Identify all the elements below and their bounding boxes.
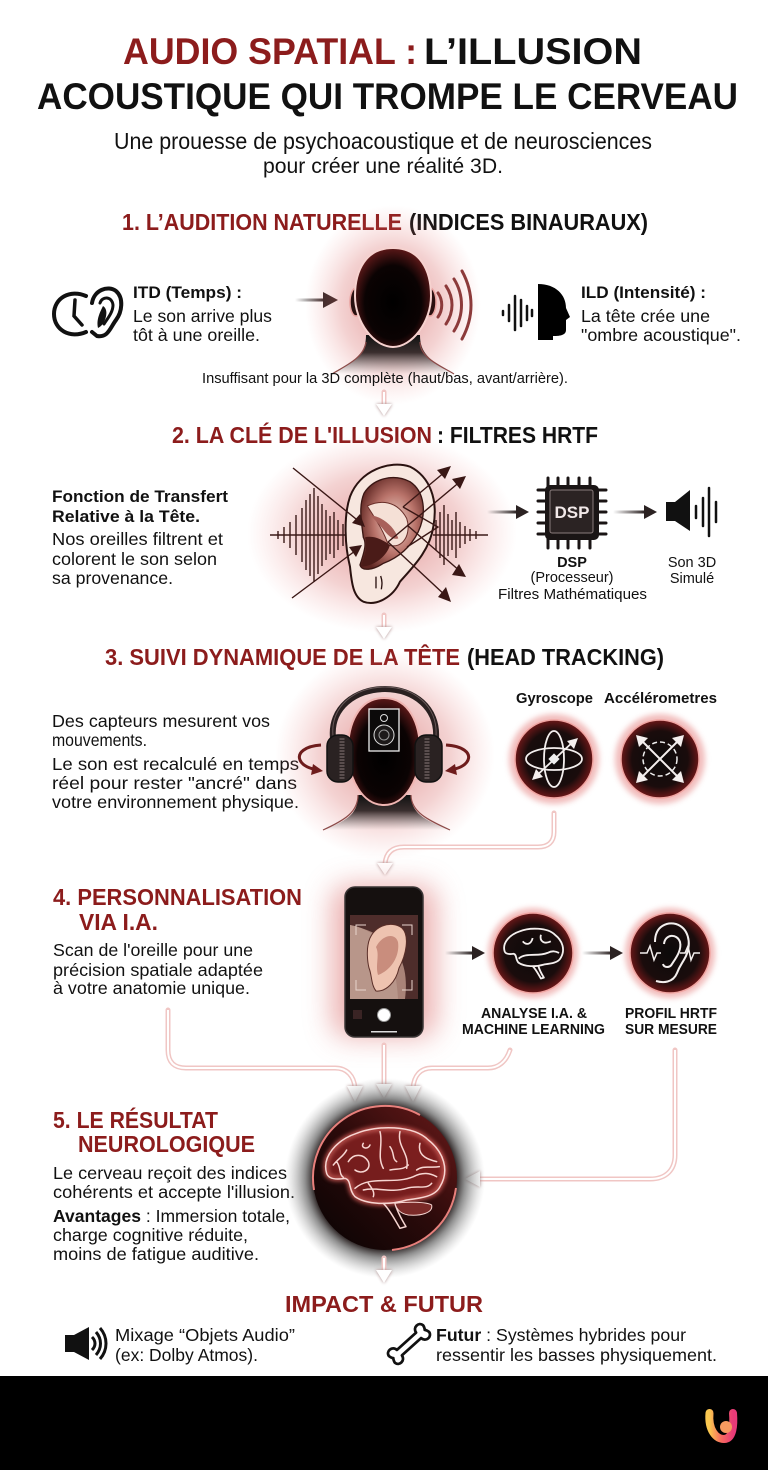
text: future [436, 1325, 717, 1365]
text: personalization [53, 940, 263, 998]
icon: speaker with waveform [666, 488, 716, 536]
black footer bar [0, 1376, 768, 1470]
illustration: phone scanning ear [332, 885, 436, 1037]
label: DSP: Filtres Mathématiques [498, 587, 647, 603]
waveform right [433, 505, 488, 565]
reflected sound arrows [292, 468, 462, 598]
text: object audio: (ex: Dolby Atmos). [115, 1345, 258, 1365]
label: 3D sound: Simulé [670, 571, 714, 587]
label: accelerometers: Accélérometres [604, 691, 717, 707]
arrow: AI to brain [405, 1050, 510, 1102]
text: head tracking: Le son est recalculé en temps [52, 754, 299, 774]
text: personalization: Scan de l'oreille pour une [53, 940, 253, 960]
heading: section 3 [105, 643, 664, 670]
note: Insuffisant pour la 3D complète (haut/bas, avant/arrière). [202, 371, 568, 387]
arrow: text to brain [168, 1010, 363, 1102]
text: ILD: ILD (Intensité) : [581, 283, 706, 302]
icon: bone [386, 1322, 432, 1366]
arrow: section 2 to 3 [376, 615, 392, 639]
text: ITD: tôt à une oreille. [133, 325, 260, 345]
text: ILD: "ombre acoustique". [581, 325, 741, 345]
text: future: Futur : Systèmes hybrides pour [436, 1325, 686, 1345]
arrow: phone to brain [376, 1045, 392, 1098]
icon: DSP chip [538, 478, 606, 548]
text: HRTF definition: Fonction de Transfert [52, 487, 228, 506]
icon: brain in circle [488, 908, 578, 998]
heading: impact and future: IMPACT & FUTUR [285, 1291, 483, 1317]
arrow: profile to brain [465, 1050, 675, 1187]
illustration: glowing brain [285, 1078, 485, 1278]
heading: section 5 [53, 1106, 255, 1157]
text: neurological result: charge cognitive réduite, [53, 1225, 248, 1245]
heading: section 4: 4. PERSONNALISATION [53, 884, 302, 910]
illustration: ear with reflected sound [247, 433, 517, 633]
title: AUDIO SPATIAL : [123, 31, 417, 72]
heading: section 2 [172, 421, 598, 448]
title [37, 31, 738, 117]
label: 3D sound: Son 3D [668, 555, 716, 571]
heading: section 5: NEUROLOGIQUE [78, 1131, 255, 1157]
title: ACOUSTIQUE QUI TROMPE LE CERVEAU [37, 76, 738, 117]
heading: section 5: 5. LE RÉSULTAT [53, 1106, 218, 1133]
text: ITD: ITD (Temps) : [133, 283, 242, 302]
illustration: head with headphones [275, 650, 495, 860]
icon: ear in circle [625, 908, 715, 998]
heading: section 3: 3. SUIVI DYNAMIQUE DE LA TÊTE [105, 643, 460, 670]
heading: section 4 [53, 884, 302, 935]
text: head tracking: votre environnement physique. [52, 792, 299, 812]
arrow: DSP to 3D sound [613, 505, 657, 519]
heading: section 1: 1. L’AUDITION NATURELLE [122, 209, 402, 235]
heading: section 1: (INDICES BINAURAUX) [409, 209, 648, 235]
icon: rotation arrows [299, 745, 469, 775]
text: neurological result: cohérents et accepte l'illusion. [53, 1182, 295, 1202]
text: object audio [115, 1325, 295, 1365]
heading: section 1 [122, 209, 648, 235]
text: neurological result: moins de fatigue auditive. [53, 1244, 259, 1264]
label: DSP [498, 555, 647, 603]
arrow: brain to impact [376, 1258, 392, 1283]
illustration: head with glow [305, 205, 481, 405]
text: head tracking: réel pour rester "ancré" dans [52, 773, 297, 793]
heading: section 2: 2. LA CLÉ DE L'ILLUSION [172, 421, 432, 448]
arrow: ear to DSP [487, 505, 529, 519]
icon: waveform and head profile [503, 284, 570, 340]
label: DSP: DSP [557, 555, 587, 571]
icon: accelerometer [615, 714, 705, 804]
label: AI analysis: MACHINE LEARNING [462, 1022, 605, 1038]
text: HRTF definition: colorent le son selon [52, 549, 217, 569]
text: head tracking [52, 711, 299, 812]
text: future: ressentir les basses physiquement. [436, 1345, 717, 1365]
label: AI analysis: ANALYSE I.A. & [481, 1006, 588, 1022]
speaker on head [369, 709, 399, 751]
label: HRTF profile [625, 1006, 717, 1038]
arrow: AI to profile [582, 946, 623, 960]
text: personalization: à votre anatomie unique. [53, 978, 250, 998]
arrow: phone to AI [445, 946, 485, 960]
text: ITD: Le son arrive plus [133, 306, 272, 326]
title: L’ILLUSION [424, 31, 642, 72]
text: HRTF definition: sa provenance. [52, 568, 173, 588]
text: object audio: Mixage “Objets Audio” [115, 1325, 295, 1345]
label: 3D sound [668, 555, 716, 587]
text: ILD [581, 283, 741, 345]
label: AI analysis [462, 1006, 605, 1038]
text: head tracking: mouvements. [52, 730, 147, 750]
icon: speaker [65, 1327, 106, 1360]
icon: DSP chip: DSP [555, 503, 589, 522]
text: HRTF definition [52, 487, 228, 588]
icon: clock and ear [54, 288, 121, 336]
text: head tracking: Des capteurs mesurent vos [52, 711, 270, 731]
subtitle: pour créer une réalité 3D. [263, 155, 503, 178]
heading: section 4: VIA I.A. [79, 909, 158, 935]
arrow: gyroscope to section 4 [377, 813, 554, 875]
text: HRTF definition: Nos oreilles filtrent et [52, 529, 223, 549]
waveform left [270, 488, 353, 582]
icon: sound waves [438, 271, 471, 339]
icon: gyroscope [509, 714, 599, 804]
text: neurological result: Avantages : Immersion totale, [53, 1206, 290, 1226]
arrow: section 1 to 2 [376, 392, 392, 416]
phone ear [367, 924, 406, 991]
label: gyroscope: Gyroscope [516, 691, 593, 707]
heading: section 2: : FILTRES HRTF [437, 422, 598, 448]
text: neurological result: Le cerveau reçoit des indices [53, 1163, 287, 1183]
text: ILD: La tête crée une [581, 306, 710, 326]
text: personalization: précision spatiale adaptée [53, 960, 263, 980]
text: neurological result [53, 1163, 295, 1264]
ear [346, 465, 435, 603]
heading: section 3: (HEAD TRACKING) [467, 644, 664, 670]
arrow: to head [295, 292, 338, 308]
label: DSP: (Processeur) [530, 570, 614, 586]
text: HRTF definition: Relative à la Tête. [52, 507, 200, 526]
label: HRTF profile: PROFIL HRTF [625, 1006, 717, 1022]
subtitle: Une prouesse de psychoacoustique et de neurosciences [114, 128, 652, 154]
label: HRTF profile: SUR MESURE [625, 1022, 717, 1038]
subtitle [114, 128, 652, 178]
logo [709, 1413, 733, 1439]
text: ITD [133, 283, 272, 345]
